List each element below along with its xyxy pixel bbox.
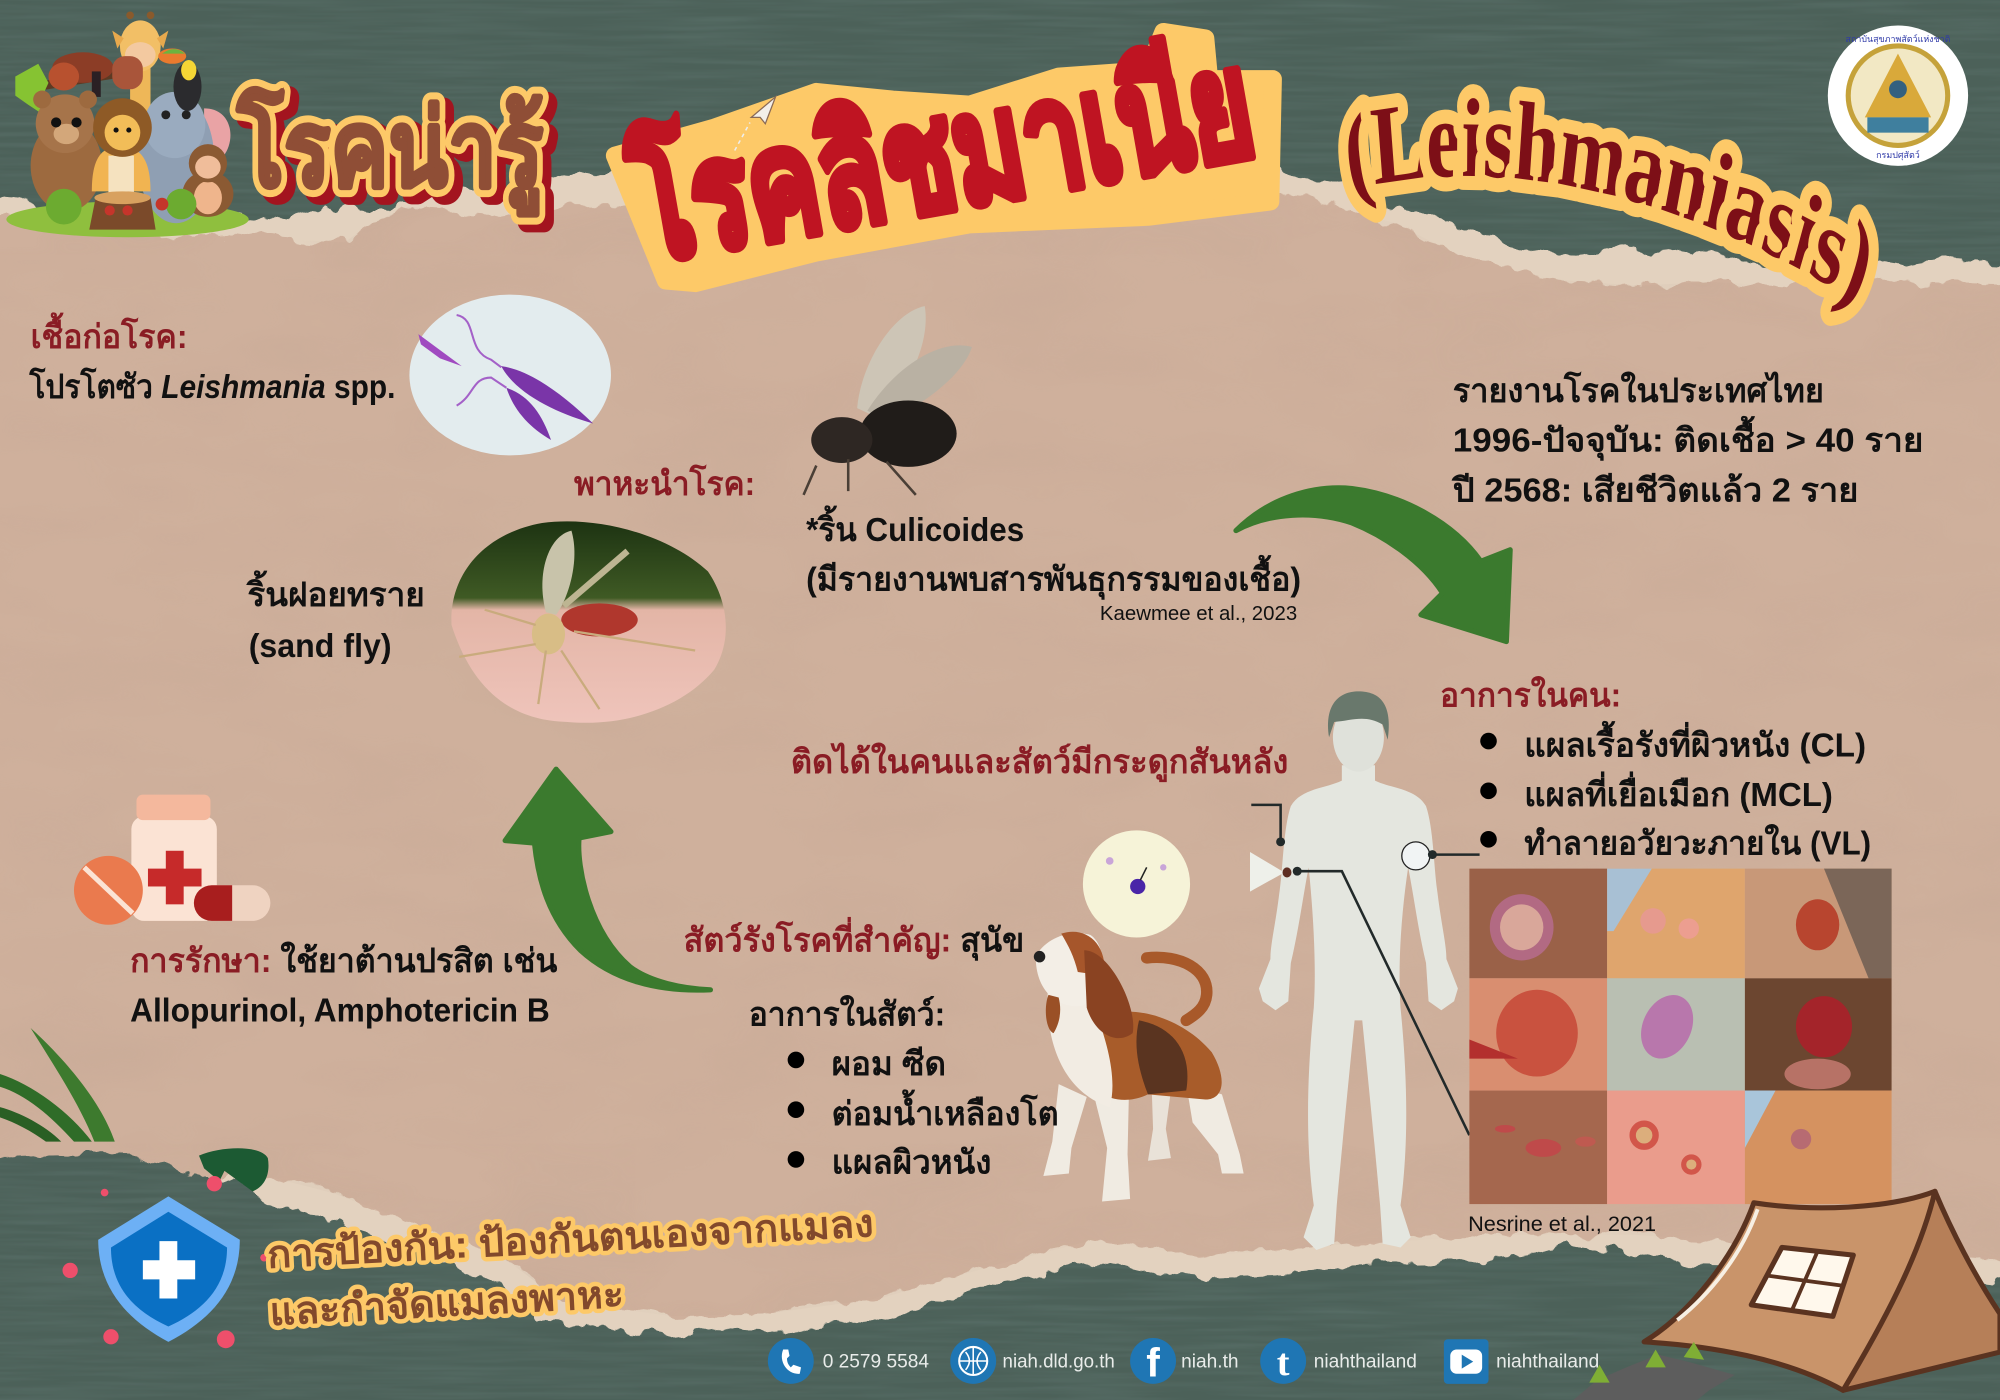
rock shapes bbox=[1573, 1355, 1735, 1400]
text block: animal symptoms bbox=[749, 995, 1059, 1181]
tablet bbox=[74, 856, 143, 925]
label: hosts statement: ติดได้ในคนและสัตว์มีกระดูกสันหลัง bbox=[791, 742, 1288, 783]
icon: shield bbox=[98, 1196, 240, 1342]
report cases: 1996-ปัจจุบัน: ติดเชื้อ > 40 ราย bbox=[1453, 416, 1923, 462]
heading shadow: โรคน่ารู้ bbox=[244, 94, 551, 223]
citation: Kaewmee et al., 2023 bbox=[1100, 603, 1297, 625]
report heading: รายงานโรคในประเทศไทย bbox=[1453, 371, 1824, 410]
twitter: niahthailand bbox=[1314, 1351, 1417, 1372]
logo: institute seal: สถาบันสุขภาพสัตว์แห่งชาติ bbox=[1846, 33, 1951, 45]
subtitle: Leishmaniasis curved: (Leishmaniasis) bbox=[1338, 84, 1879, 326]
decorative plants bbox=[0, 1028, 268, 1191]
grass tufts bbox=[1589, 1342, 1704, 1383]
callout dots bbox=[1276, 837, 1437, 876]
facebook: niah.th bbox=[1181, 1351, 1239, 1372]
leaves bbox=[15, 64, 48, 115]
rear leg bbox=[1186, 1084, 1244, 1173]
label: pathogen heading: เชื้อก่อโรค: bbox=[31, 312, 187, 356]
logo: institute seal bbox=[1828, 26, 1968, 166]
text block: Thailand report bbox=[1452, 371, 1923, 509]
text block: sand fly label bbox=[246, 570, 425, 665]
image: blood smear bbox=[1083, 830, 1190, 938]
pathogen name: โปรโตซัว Leishmania spp. bbox=[28, 367, 395, 406]
photo a bbox=[1469, 869, 1607, 978]
bottle bbox=[131, 795, 217, 921]
body bbox=[1084, 1012, 1222, 1100]
illustration: beagle dog bbox=[1034, 932, 1244, 1202]
far legs bbox=[1148, 1091, 1171, 1161]
body bbox=[1259, 765, 1458, 1250]
ear bbox=[1084, 950, 1133, 1038]
text block: treatment bbox=[130, 941, 558, 1030]
MCL: แผลที่เยื่อเมือก (MCL) bbox=[1524, 771, 1833, 814]
small ear bbox=[1046, 995, 1060, 1033]
prevention line 2: และกำจัดแมลงพาหะ bbox=[269, 1273, 625, 1334]
photo c bbox=[1745, 869, 1892, 978]
photo d bbox=[1469, 978, 1607, 1091]
ground grass bbox=[6, 202, 249, 237]
human symptoms heading: อาการในคน: bbox=[1440, 676, 1621, 715]
illustration: zoo animals group bbox=[6, 11, 249, 237]
symptom 3: แผลผิวหนัง bbox=[832, 1144, 992, 1181]
treatment line 1: การรักษา: ใช้ยาต้านปรสิต เช่น bbox=[130, 941, 558, 980]
heading: โรคน่ารู้ bbox=[236, 87, 551, 223]
treatment line 2: Allopurinol, Amphotericin B bbox=[130, 993, 550, 1030]
phone bbox=[768, 1338, 929, 1384]
English name: (sand fly) bbox=[249, 628, 392, 665]
phone: 0 2579 5584 bbox=[823, 1351, 929, 1372]
youtube: niahthailand bbox=[1496, 1351, 1599, 1372]
CL: แผลเรื้อรังที่ผิวหนัง (CL) bbox=[1524, 720, 1866, 764]
note line 1: *ริ้น Culicoides bbox=[806, 505, 1024, 549]
symptom 2: ต่อมน้ำเหลืองโต bbox=[832, 1089, 1059, 1133]
photo h bbox=[1607, 1091, 1745, 1204]
main title: โรคลิชมาเนีย bbox=[615, 16, 1273, 293]
animal symptoms heading: อาการในสัตว์: bbox=[749, 995, 945, 1034]
illustration: human body bbox=[1250, 691, 1480, 1250]
capsule bbox=[194, 885, 270, 921]
photo f bbox=[1745, 978, 1892, 1091]
image: leishmania micrograph bbox=[409, 295, 611, 455]
facebook: f bbox=[1146, 1339, 1160, 1385]
virus dots bbox=[62, 1176, 268, 1348]
illustration: rocks bbox=[1573, 1342, 1735, 1400]
illustration: tent bbox=[1644, 1191, 2000, 1390]
arrow: green to human bbox=[1236, 488, 1510, 642]
lesion dot bbox=[1283, 867, 1291, 878]
photo i bbox=[1745, 1091, 1892, 1204]
text block: Culicoides note bbox=[806, 505, 1301, 625]
report deaths: ปี 2568: เสียชีวิตแล้ว 2 ราย bbox=[1452, 471, 1858, 509]
chest bbox=[1048, 982, 1112, 1107]
elephant bbox=[136, 92, 230, 223]
bullets bbox=[1480, 733, 1497, 848]
logo: institute seal: กรมปศุสัตว์ bbox=[1876, 149, 1920, 161]
label: reservoir: สัตว์รังโรคที่สำคัญ: สุนัข bbox=[684, 917, 1024, 962]
tail bbox=[1147, 957, 1207, 1020]
prevention line 1: การป้องกัน: ป้องกันตนเองจากแมลง bbox=[266, 1202, 875, 1277]
twitter bbox=[1260, 1338, 1417, 1384]
tent side panel bbox=[1843, 1191, 2000, 1390]
symptom 1: ผอม ซีด bbox=[832, 1045, 946, 1083]
image grid: skin lesions bbox=[1469, 869, 1892, 1204]
footer: contact bar bbox=[768, 1338, 1599, 1385]
injection marker bbox=[1250, 852, 1284, 892]
photo g bbox=[1469, 1091, 1607, 1204]
tent front bbox=[1644, 1191, 1935, 1390]
website bbox=[950, 1338, 1115, 1384]
website: niah.dld.go.th bbox=[1003, 1351, 1115, 1372]
tent window bbox=[1751, 1247, 1853, 1316]
image: sand fly photo bbox=[451, 521, 726, 723]
text block: human symptoms bbox=[1440, 676, 1871, 863]
note line 2: (มีรายงานพบสารพันธุกรรมของเชื้อ) bbox=[806, 555, 1301, 601]
nose bbox=[1034, 951, 1045, 962]
twitter: t bbox=[1277, 1342, 1290, 1384]
giraffe bbox=[112, 11, 168, 179]
heading text outline: โรคน่ารู้ bbox=[236, 87, 543, 216]
skin circle bbox=[1402, 842, 1430, 870]
monkey bbox=[182, 144, 233, 217]
facebook bbox=[1130, 1338, 1239, 1385]
front legs bbox=[1043, 1084, 1130, 1202]
VL: ทำลายอวัยวะภายใน (VL) bbox=[1524, 824, 1871, 863]
icon: paper plane bbox=[735, 97, 776, 151]
tree stump and bushes bbox=[46, 189, 196, 230]
icon: medicine bottle and pills bbox=[74, 795, 270, 925]
icon: palm fronds bbox=[0, 1028, 115, 1142]
youtube bbox=[1444, 1339, 1599, 1384]
head bbox=[1333, 703, 1384, 772]
callout lines bbox=[1251, 805, 1480, 1135]
Thai name: ริ้นฝอยทราย bbox=[246, 570, 425, 614]
heading text fill: โรคน่ารู้ bbox=[236, 87, 543, 216]
text block: prevention bbox=[266, 1202, 875, 1334]
ridge highlight bbox=[1677, 1209, 1758, 1320]
toucan bbox=[158, 48, 202, 111]
hair bbox=[1328, 691, 1389, 740]
image: black Culicoides midge bbox=[804, 306, 972, 495]
label: vector heading: พาหะนำโรค: bbox=[574, 464, 755, 503]
photo b bbox=[1607, 869, 1745, 978]
citation: lesions: Nesrine et al., 2021 bbox=[1468, 1211, 1656, 1236]
bullets bbox=[788, 1052, 804, 1168]
red panda on branch bbox=[19, 52, 143, 97]
icon: monstera leaf bbox=[199, 1148, 268, 1191]
bear bbox=[31, 91, 102, 212]
title backing shape bbox=[615, 32, 1273, 283]
arrow: green to sand fly bbox=[505, 769, 710, 990]
text block: pathogen bbox=[28, 312, 395, 406]
head bbox=[1036, 933, 1102, 1006]
photo e bbox=[1607, 978, 1745, 1091]
lion bbox=[92, 98, 152, 194]
